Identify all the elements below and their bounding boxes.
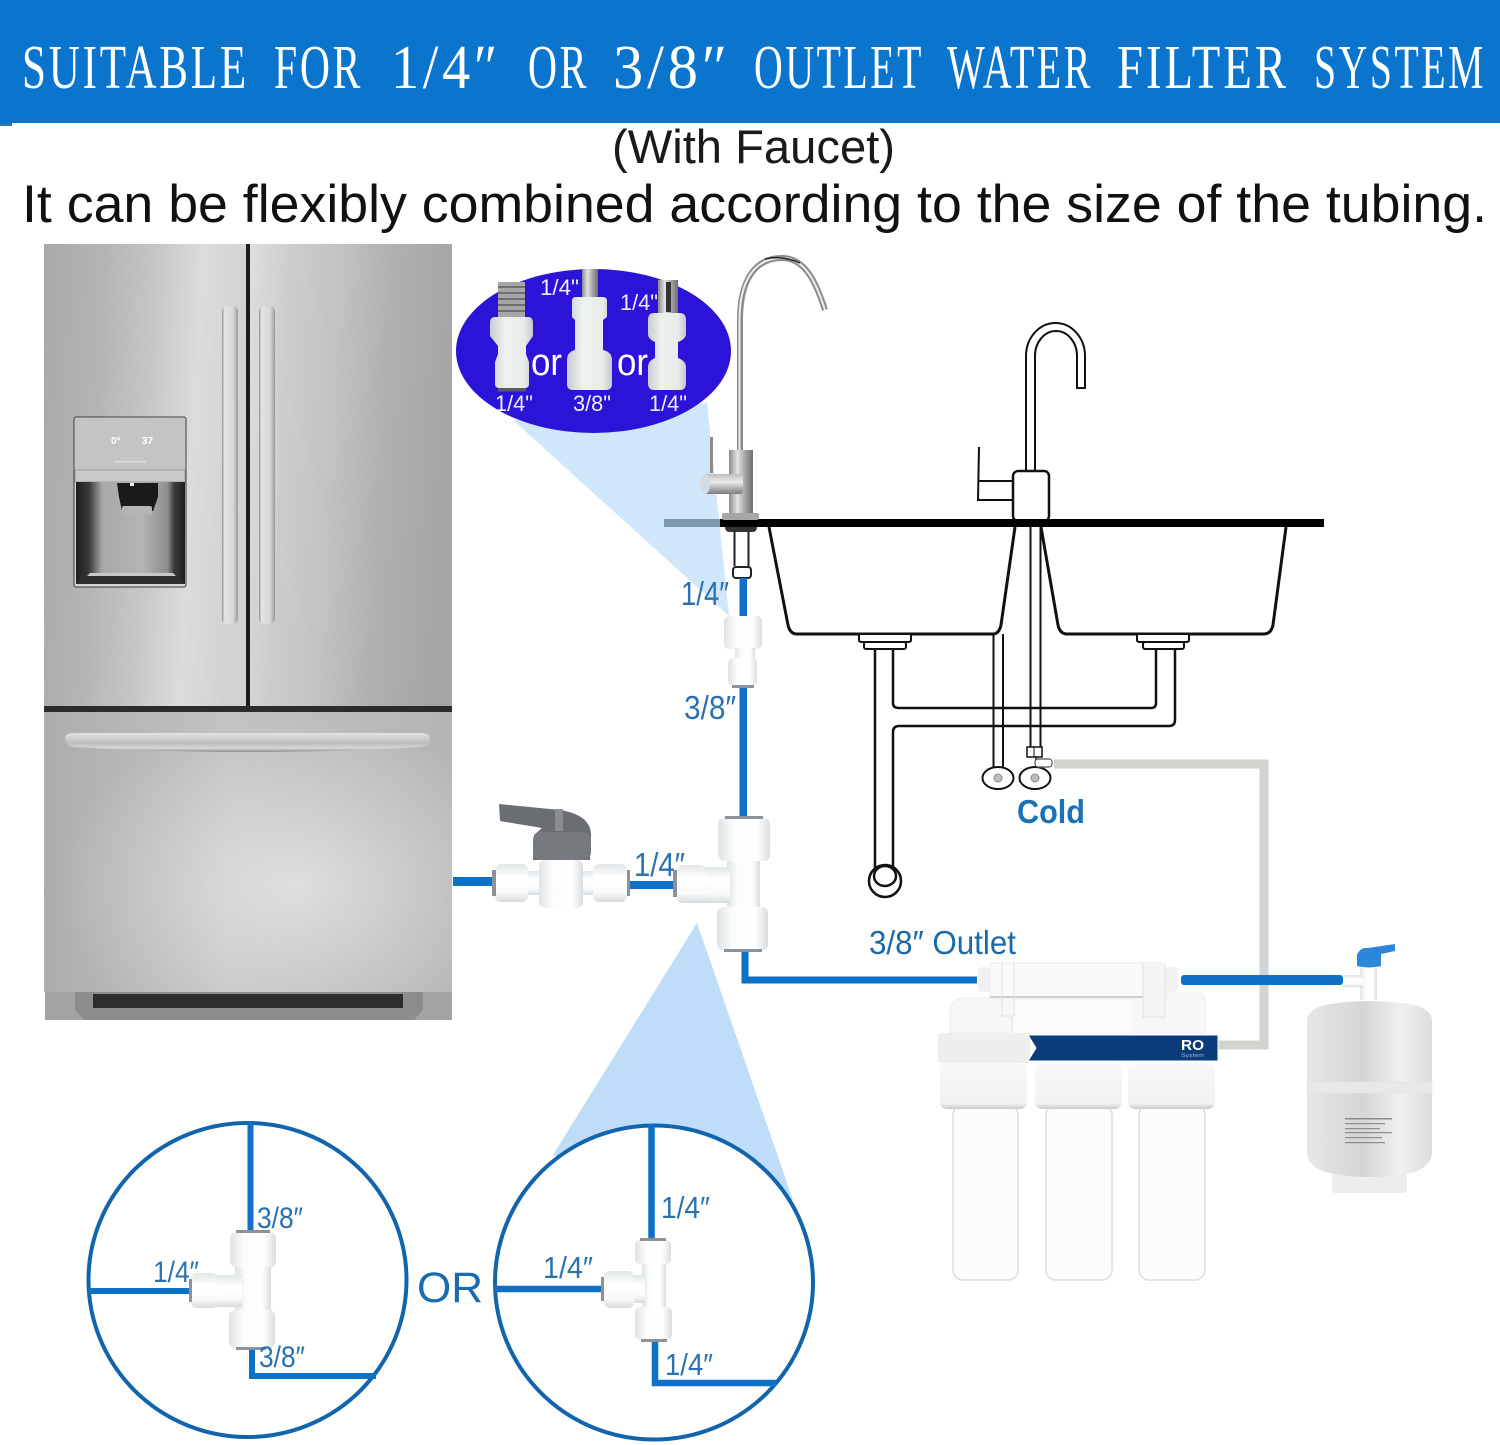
sink faucet outline <box>978 323 1085 521</box>
magnified connector options: or <box>531 342 562 384</box>
magnified connector options: 1/4" <box>495 391 533 416</box>
banner title: OR <box>528 34 589 102</box>
detail circle: 3/8 tee: 1/4″ <box>153 1256 199 1289</box>
header banner <box>0 0 1500 126</box>
RO blue label: RO <box>1181 1038 1204 1054</box>
cold escutcheon <box>1020 747 1050 789</box>
refrigerator <box>44 244 452 1020</box>
fridge base grill <box>45 992 452 1020</box>
detail circle: 3/8 tee: 3/8″ <box>257 1202 303 1235</box>
hot escutcheon <box>982 767 1014 789</box>
tubing: fridge to valve <box>453 877 493 886</box>
label: 1/4 at faucet: 1/4″ <box>681 575 729 612</box>
valve handle <box>499 804 591 860</box>
subtitle: flexible combination: It can be flexibly combined according to the size of the tubing. <box>22 175 1487 234</box>
tank label text <box>1345 1118 1392 1143</box>
faucet shank <box>725 527 757 578</box>
detail circle: 1/4 tee <box>495 1125 813 1440</box>
magnifier cone: faucet connector <box>513 403 729 616</box>
tubing: tee to RO outlet <box>745 952 977 980</box>
tank blue valve <box>1357 944 1395 968</box>
faucet lever <box>710 437 713 473</box>
counter top <box>664 519 1324 527</box>
shut-off valve <box>492 804 630 908</box>
hot supply line <box>994 634 1003 769</box>
right basin <box>1041 527 1286 634</box>
tank neck and fitting <box>1343 968 1377 1000</box>
label: 3/8 at faucet line: 3/8″ <box>684 689 736 726</box>
drawer handle <box>65 733 430 752</box>
tank seam <box>1307 1082 1432 1093</box>
fridge lower drawer <box>44 712 452 992</box>
RO blue label: System <box>1181 1053 1205 1059</box>
RO blue label <box>1028 1035 1218 1061</box>
reference faucet <box>700 258 825 578</box>
fridge right handle <box>259 306 275 624</box>
banner title: OUTLET <box>754 34 924 102</box>
faucet handle <box>700 474 743 494</box>
detail circle: 1/4 tee: 1/4″ <box>665 1347 713 1382</box>
water and ice dispenser: 37 <box>142 436 154 447</box>
subtitle: with faucet: (With Faucet) <box>612 120 895 173</box>
tubing: valve to tee <box>630 881 673 889</box>
banner title: 3/8″ <box>613 34 731 102</box>
tee fitting left circle <box>189 1230 276 1350</box>
banner title: FOR <box>274 34 363 102</box>
p-trap <box>869 865 901 897</box>
fridge left handle <box>222 306 238 624</box>
RO filter system <box>938 963 1218 1280</box>
main tee fitting <box>673 816 770 952</box>
filter bottles <box>953 1105 1205 1280</box>
grey cold water feed line <box>1054 764 1264 1045</box>
detail circle: 3/8 tee: 3/8″ <box>259 1341 305 1374</box>
faucet body <box>729 450 753 513</box>
OR label between circles: OR <box>417 1264 483 1312</box>
banner title <box>22 34 1486 102</box>
connector option 3 <box>648 280 686 390</box>
faucet spout <box>740 258 825 452</box>
storage tank <box>1307 944 1432 1193</box>
banner title: SUITABLE <box>22 34 249 102</box>
connector option 2 <box>567 269 612 390</box>
label: 1/4 valve to tee: 1/4″ <box>634 846 685 883</box>
tubing in left circle <box>88 1122 376 1376</box>
tubing in right circle <box>495 1125 776 1383</box>
detail circle: 1/4 tee: 1/4″ <box>543 1250 593 1285</box>
tank body <box>1307 1001 1432 1177</box>
banner title: FILTER <box>1117 34 1289 102</box>
connector option 1 <box>490 282 533 392</box>
drain pipes <box>874 649 876 880</box>
reducer coupler <box>724 616 762 688</box>
valve body <box>528 871 596 895</box>
banner title: 1/4″ <box>391 34 501 102</box>
tank base <box>1332 1165 1407 1193</box>
tubing: faucet to tee <box>740 578 747 818</box>
membrane housing <box>950 963 1205 1033</box>
water and ice dispenser: 0° <box>111 436 121 447</box>
cold supply line <box>1030 527 1040 748</box>
fridge upper left door <box>44 244 246 706</box>
tubing: RO to tank <box>1181 975 1343 985</box>
magnified connector options: or <box>617 342 648 384</box>
cold valve stub <box>1035 759 1052 767</box>
detail circle: 3/8 tee <box>88 1122 406 1437</box>
fridge upper right door <box>250 244 452 706</box>
magnified connector options <box>456 269 731 433</box>
magnified connector options: 3/8" <box>573 391 611 416</box>
drains <box>859 634 1189 649</box>
faucet base <box>722 513 759 520</box>
banner title: WATER <box>947 34 1093 102</box>
label: cold: Cold <box>1017 793 1085 830</box>
detail circle: 1/4 tee: 1/4″ <box>661 1190 710 1225</box>
magnifier cone: tee fitting <box>553 923 793 1200</box>
bracket band <box>938 1033 1030 1063</box>
magnified connector options: 1/4" <box>620 290 658 315</box>
label: 3/8 outlet: 3/8″ Outlet <box>869 924 1016 961</box>
tee fitting right circle <box>601 1238 672 1342</box>
water and ice dispenser <box>74 417 186 587</box>
magnified connector options: 1/4" <box>649 391 687 416</box>
left basin <box>769 527 1015 634</box>
sink line drawing <box>769 323 1286 897</box>
filter caps <box>940 1063 1215 1109</box>
magnified connector options: 1/4" <box>540 275 579 300</box>
